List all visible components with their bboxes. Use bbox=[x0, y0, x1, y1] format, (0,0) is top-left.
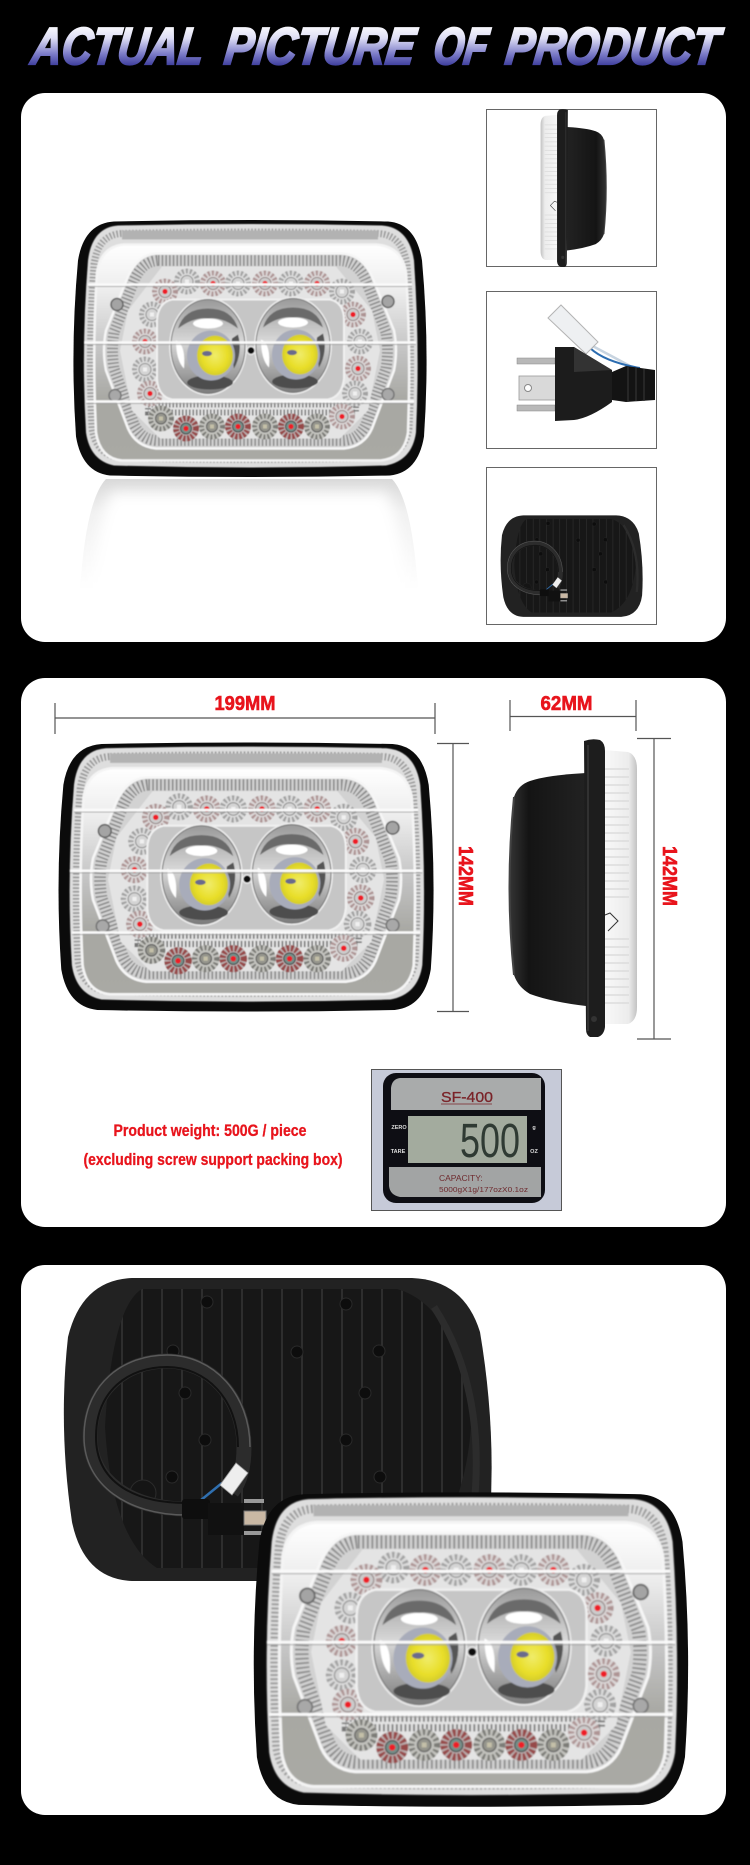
front view of headlight bbox=[254, 1492, 688, 1807]
thumbnail: back view bbox=[486, 468, 656, 624]
title bbox=[27, 18, 726, 76]
dimension: depth 62MM bbox=[510, 693, 636, 731]
back view of headlight bbox=[64, 1278, 492, 1581]
weight note: Product weight: 500G / piece bbox=[114, 1121, 306, 1140]
lamp reflection bbox=[80, 479, 418, 600]
title: ACTUAL bbox=[27, 18, 208, 76]
dimension: depth 62MM: 62MM bbox=[540, 693, 592, 715]
kitchen scale photo: OZ bbox=[530, 1149, 538, 1155]
kitchen scale photo: 500 bbox=[460, 1115, 520, 1168]
side view bbox=[510, 739, 637, 1037]
dimension: width 199MM: 199MM bbox=[214, 693, 276, 715]
dimension: height 142MM side: 142MM bbox=[658, 846, 680, 906]
title: OF bbox=[431, 18, 492, 76]
front view of headlight bbox=[73, 220, 427, 477]
thumbnail: side view bbox=[486, 109, 656, 267]
panel: dimensions and weight bbox=[21, 678, 726, 1227]
weight note bbox=[84, 1121, 342, 1169]
kitchen scale photo: TARE bbox=[391, 1149, 406, 1155]
weight note: (excluding screw support packing box) bbox=[84, 1150, 342, 1169]
kitchen scale photo: SF-400 bbox=[441, 1089, 493, 1106]
kitchen scale photo bbox=[372, 1070, 562, 1210]
dimension: height 142MM front bbox=[437, 744, 476, 1012]
dimension: width 199MM bbox=[55, 693, 435, 734]
kitchen scale photo: CAPACITY: bbox=[439, 1173, 483, 1183]
title: PICTURE bbox=[222, 18, 420, 76]
kitchen scale photo: ZERO bbox=[391, 1125, 407, 1131]
panel: back and front together bbox=[21, 1265, 726, 1815]
front view with dimensions bbox=[59, 742, 434, 1012]
kitchen scale photo: 5000gX1g/177ozX0.1oz bbox=[439, 1185, 528, 1194]
dimension: height 142MM front: 142MM bbox=[454, 846, 476, 906]
dimension: height 142MM side bbox=[637, 738, 680, 1039]
kitchen scale photo: g bbox=[532, 1125, 536, 1131]
thumbnail: H4 plug bbox=[486, 292, 656, 448]
panel: product views bbox=[21, 93, 726, 642]
